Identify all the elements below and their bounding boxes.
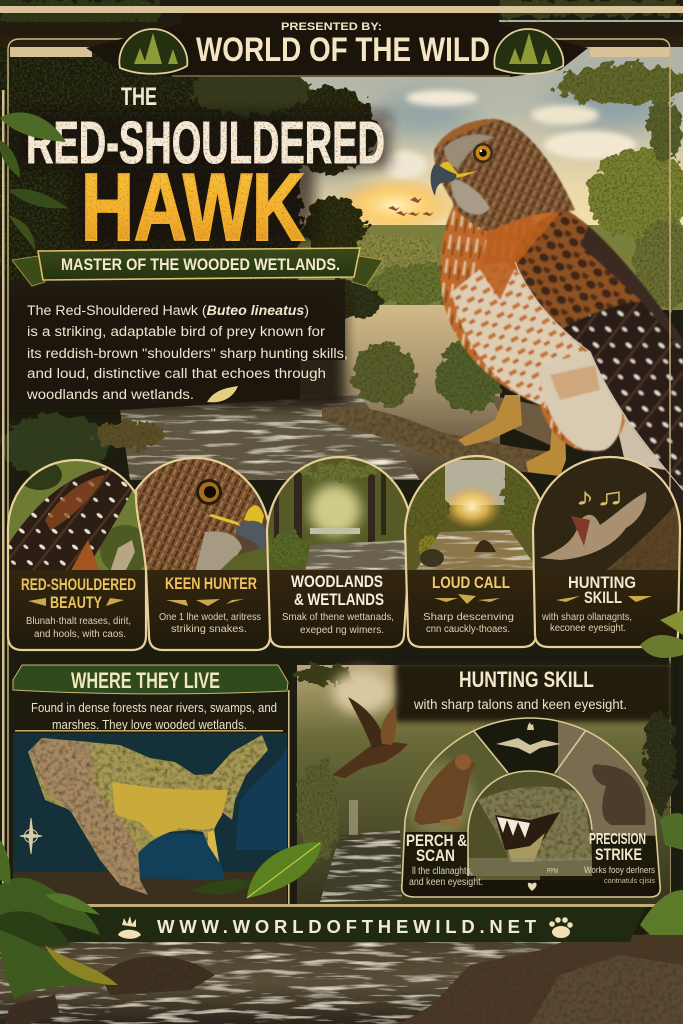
intro paragraph: woodlands and wetlands. <box>26 387 194 402</box>
footer paw icon right <box>549 917 573 938</box>
hawk pale belly <box>538 350 622 451</box>
card text: striking snakes. <box>171 624 247 635</box>
icon: small bird <box>496 738 561 754</box>
foreground leaves right <box>640 610 683 935</box>
panel heading band <box>13 665 288 694</box>
lake <box>300 305 500 480</box>
land: yellow central region <box>112 782 228 838</box>
card: red-shouldered beauty <box>0 455 150 655</box>
card text <box>541 612 632 634</box>
header tree badge left <box>119 29 187 74</box>
step: perch and scan: PERCH & <box>406 831 467 850</box>
rocks left <box>100 956 215 995</box>
step: precision strike: PRECISION <box>589 831 646 848</box>
card text <box>159 612 261 635</box>
land: western mountains <box>28 738 148 895</box>
hawk wing <box>516 210 683 490</box>
header tree badge right <box>494 29 563 74</box>
panel: where they live <box>12 664 290 912</box>
branch <box>322 407 560 476</box>
scene heading: HUNTING SKILL <box>459 667 594 692</box>
title line the: THE <box>121 83 157 111</box>
card title: LOUD CALL <box>432 573 510 592</box>
strategy arch diagram <box>398 715 664 902</box>
top-left leaves <box>0 112 68 250</box>
card title: HUNTING <box>568 573 636 592</box>
music notes: ♪♫ <box>575 484 625 511</box>
panel text: marshes. They love wooded wetlands. <box>52 717 247 732</box>
card ornament <box>434 594 500 604</box>
card text: and hools, with caos. <box>34 629 126 640</box>
frame lower edge <box>0 904 683 907</box>
card text <box>423 612 514 635</box>
presented by: PRESENTED BY: <box>281 21 382 33</box>
card text: keconee eyesight. <box>550 623 626 634</box>
big green leaf <box>190 842 322 898</box>
title line red-shouldered: RED-SHOULDERED <box>26 110 385 176</box>
subtitle ribbon <box>12 248 383 286</box>
icon: heart <box>528 883 537 891</box>
card text <box>282 612 394 636</box>
step: perch and scan: ll the cllanaghts, <box>412 866 473 877</box>
hawk eye <box>473 143 493 163</box>
perched hawk <box>406 754 476 838</box>
hawk beak <box>431 162 478 196</box>
icon: crown <box>527 722 534 730</box>
hawk plumage group <box>434 119 683 500</box>
card: loud call <box>404 454 540 648</box>
card: red-shouldered beauty: BEAUTY <box>50 593 102 612</box>
card: woodlands and wetlands: & WETLANDS <box>294 590 384 609</box>
title <box>12 83 390 261</box>
card ornament <box>556 596 652 602</box>
card title: KEEN HUNTER <box>165 574 257 593</box>
bottom dark panels <box>403 832 476 880</box>
card text: exeped ng wimers. <box>300 625 384 636</box>
centre wedge <box>475 718 558 773</box>
card title: RED-SHOULDERED <box>21 575 136 594</box>
step: perch and scan: SCAN <box>416 846 455 865</box>
intro paragraph: The Red-Shouldered Hawk ( Buteo lineatus ) <box>27 303 309 318</box>
card ornament <box>166 599 244 606</box>
scene heading area <box>395 662 673 722</box>
panel text: Found in dense forests near rivers, swamps, and <box>31 700 277 715</box>
panel: where they live: WHERE THEY LIVE <box>71 668 220 693</box>
card title: WOODLANDS <box>291 572 383 591</box>
hawk cheek <box>451 178 490 214</box>
title line hawk: HAWK <box>81 154 305 261</box>
flying hawk <box>332 697 408 778</box>
intro paragraph: and loud, distinctive call that echoes through <box>27 366 326 381</box>
left dark foliage <box>0 30 385 320</box>
step: precision strike: contnatuls cjisis <box>604 876 655 885</box>
card text: One 1 lhe wodet, aritress <box>159 612 261 623</box>
hawk thigh <box>490 395 560 445</box>
land: eastern states <box>28 735 268 862</box>
alligator scene <box>468 772 592 876</box>
card: woodlands and wetlands <box>262 455 412 655</box>
intro paragraph <box>26 303 348 402</box>
scene foliage <box>297 665 676 860</box>
intro dark area and foreground shore <box>0 280 504 475</box>
river foreground bottom <box>0 930 683 1024</box>
distant hills and right trees <box>280 65 683 310</box>
footer paw icon left <box>118 916 141 939</box>
intro paragraph: is a striking, adaptable bird of prey known for <box>27 324 326 339</box>
card text: Blunah·thalt reases, dirit, <box>26 616 131 627</box>
hawk illustration <box>431 119 683 520</box>
hawk barred chest <box>452 262 590 405</box>
river foreground <box>120 395 420 480</box>
header banner <box>86 14 588 77</box>
step: precision strike: PPM <box>547 868 558 875</box>
footer banner <box>30 907 645 942</box>
card text: Smak of thene wettanads, <box>282 612 394 623</box>
step: precision strike: STRIKE <box>595 845 642 864</box>
card text: Sharp descenving <box>423 612 514 623</box>
step: perch and scan: and keen eyesight. <box>409 877 483 888</box>
subtitle ribbon: MASTER OF THE WOODED WETLANDS. <box>61 255 340 274</box>
hawk nape orange <box>480 212 560 300</box>
hawk breast <box>440 200 627 451</box>
map <box>13 733 287 912</box>
waterfall <box>320 830 402 902</box>
card: hunting skill <box>530 455 683 655</box>
icon: compass <box>20 818 42 854</box>
card text <box>26 616 131 640</box>
card ornament <box>28 598 124 606</box>
card: hunting skill: SKILL <box>584 588 622 607</box>
sky with clouds <box>270 20 683 250</box>
hawk head <box>434 119 575 232</box>
brand name: WORLD OF THE WILD <box>196 31 490 69</box>
card text: with sharp ollanagnts, <box>541 612 632 623</box>
step: precision strike: Works fooy derlners <box>584 865 655 876</box>
card text: cnn cauckly-thoaes. <box>426 624 510 635</box>
foreground leaves left <box>0 840 118 1000</box>
icon: feather <box>207 386 238 402</box>
right bird <box>558 720 663 835</box>
small flying birds <box>388 197 434 216</box>
card: keen hunter <box>130 455 275 655</box>
panel text <box>31 700 277 732</box>
scene subheading: with sharp talons and keen eyesight. <box>413 697 627 712</box>
intro paragraph: its reddish-brown "shoulders" sharp hunting skills, <box>27 346 348 361</box>
panel: hunting skill scene <box>297 662 676 905</box>
hawk legs and talons <box>458 395 566 476</box>
footer url: WWW.WORLDOFTHEWILD.NET <box>157 916 537 937</box>
right divider <box>555 730 586 773</box>
hawk tail and back <box>590 400 683 520</box>
top forest strip <box>0 0 683 24</box>
step: precision strike <box>547 831 655 885</box>
hawk wing edge <box>515 262 683 490</box>
step: perch and scan <box>406 831 483 888</box>
rocks right <box>400 930 683 1024</box>
